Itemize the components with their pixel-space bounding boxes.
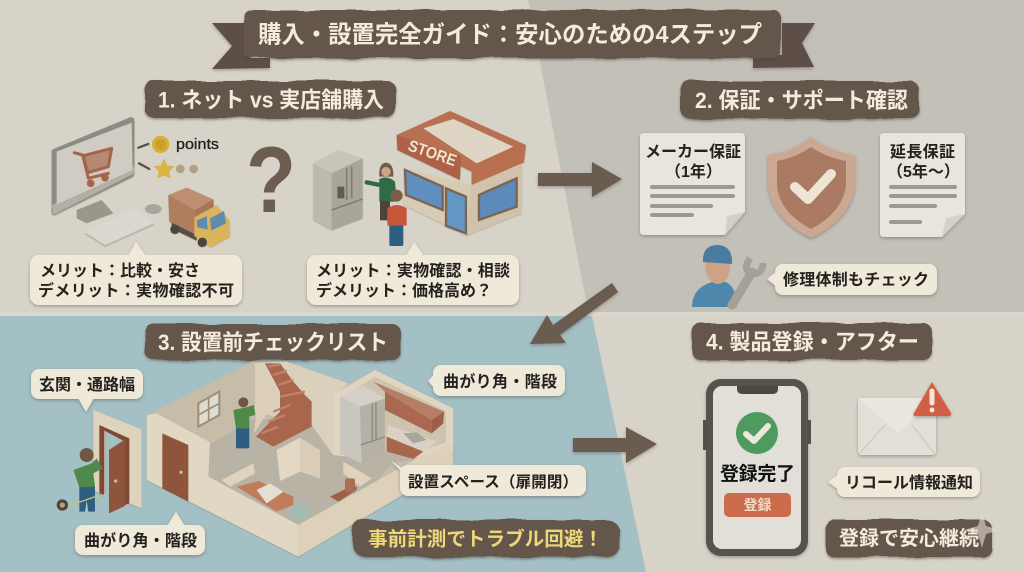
document: manufacturer warranty: （1年） [665,162,722,181]
panel: step 4 registration [692,323,1000,557]
lower cabinets [387,437,423,459]
message: avoid trouble [353,520,620,557]
icon: repair technician [692,245,763,307]
callout: installation space: 設置スペース（扉開閉） [408,473,578,491]
callout: online merits: デメリット：実物確認不可 [38,281,234,300]
person [79,486,95,512]
door [162,433,188,502]
icon: cart [74,148,112,186]
figure: customer [387,190,407,246]
front wall left [147,413,298,557]
callout: entrance width: 玄関・通路幅 [39,375,135,394]
partition centre [277,438,320,481]
callout: repair check: 修理体制もチェック [783,271,929,289]
front wall right [298,443,453,557]
document: extended warranty: （5年〜） [887,162,960,181]
heading: step 3: 3. 設置前チェックリスト [158,330,388,355]
callout: online merits [30,242,242,305]
icon: shield with check [768,137,855,238]
callout: recall notice [828,467,980,497]
icon: points coin and star [138,136,198,178]
document: manufacturer warranty: メーカー保証 [645,143,741,161]
heading: step 1 [145,81,396,118]
callout: corners and stairs bottom [75,512,205,555]
document: extended warranty [880,133,965,237]
icon: refrigerator [313,150,363,230]
back wall left [157,363,255,443]
callout: store merits [307,242,519,305]
arrow: step 3 to 4 [573,427,657,463]
staircase [256,363,312,447]
icon: envelope with warning [858,382,951,455]
callout: corners and stairs top: 曲がり角・階段 [443,372,557,391]
tape measure [67,495,100,507]
panel: step 1 online vs store [30,81,526,305]
callout: installation space [390,460,586,496]
heading: step 4: 4. 製品登録・アフター [706,330,919,354]
heading: step 2 [681,81,919,119]
kitchen wall [333,370,453,462]
callout: online merits: メリット：比較・安さ [40,261,200,280]
bed [237,481,293,512]
partition lower right [343,462,372,487]
kitchen floor [340,452,413,465]
window [198,392,219,427]
label: points: points [176,137,219,153]
fridge [340,386,385,463]
illustration: house cutaway [147,362,453,557]
figure: staff [367,163,397,220]
arrow: step 1 to 2 [538,162,622,197]
callout: recall notice: リコール情報通知 [845,473,973,492]
heading: step 3 [145,324,401,360]
store sign: STORE [406,138,459,170]
callout: repair check [767,264,937,295]
icon: computer with cart [52,117,162,247]
callout: entrance width [31,369,143,412]
heading: step 2: 2. 保証・サポート確認 [695,88,908,113]
arrow: step 2 to 3 [530,283,618,344]
counter [387,425,437,452]
heading: step 1: 1. ネット vs 実店舗購入 [158,88,384,112]
title banner [212,10,815,69]
table and chair [330,478,357,502]
title text: 購入・設置完全ガイド：安心のための4ステップ [258,22,762,48]
heading: step 4 [692,323,932,360]
person measuring [233,397,255,448]
icon: delivery truck [168,188,230,247]
illustration: door with measuring person [57,410,142,513]
stair partition [254,363,278,433]
icon: sparkle [964,512,1000,548]
icon: store building [397,111,526,236]
text: registration complete: 登録完了 [720,463,795,485]
message: avoid trouble: 事前計測でトラブル回避！ [368,528,603,550]
back wall right [255,362,348,455]
button: register [724,493,791,517]
callout: corners and stairs bottom: 曲がり角・階段 [84,531,197,550]
callout: corners and stairs top [428,365,565,396]
upper cabinets [373,382,444,433]
partition lower left [222,463,255,487]
message: continued peace of mind: 登録で安心継続 [839,527,979,550]
icon: question mark: ? [246,127,296,232]
callout: store merits: メリット：実物確認・相談 [316,261,510,280]
panel: step 2 warranty [640,81,965,307]
callout: store merits: デメリット：価格高め？ [316,281,492,300]
button: register: 登録 [744,497,772,513]
message: continued peace of mind [825,520,992,557]
panel: step 3 checklist [31,324,620,557]
document: manufacturer warranty [640,133,745,235]
icon: smartphone [703,379,811,556]
cushion [289,503,311,520]
document: extended warranty: 延長保証 [890,143,955,161]
icon: green check [736,412,778,454]
